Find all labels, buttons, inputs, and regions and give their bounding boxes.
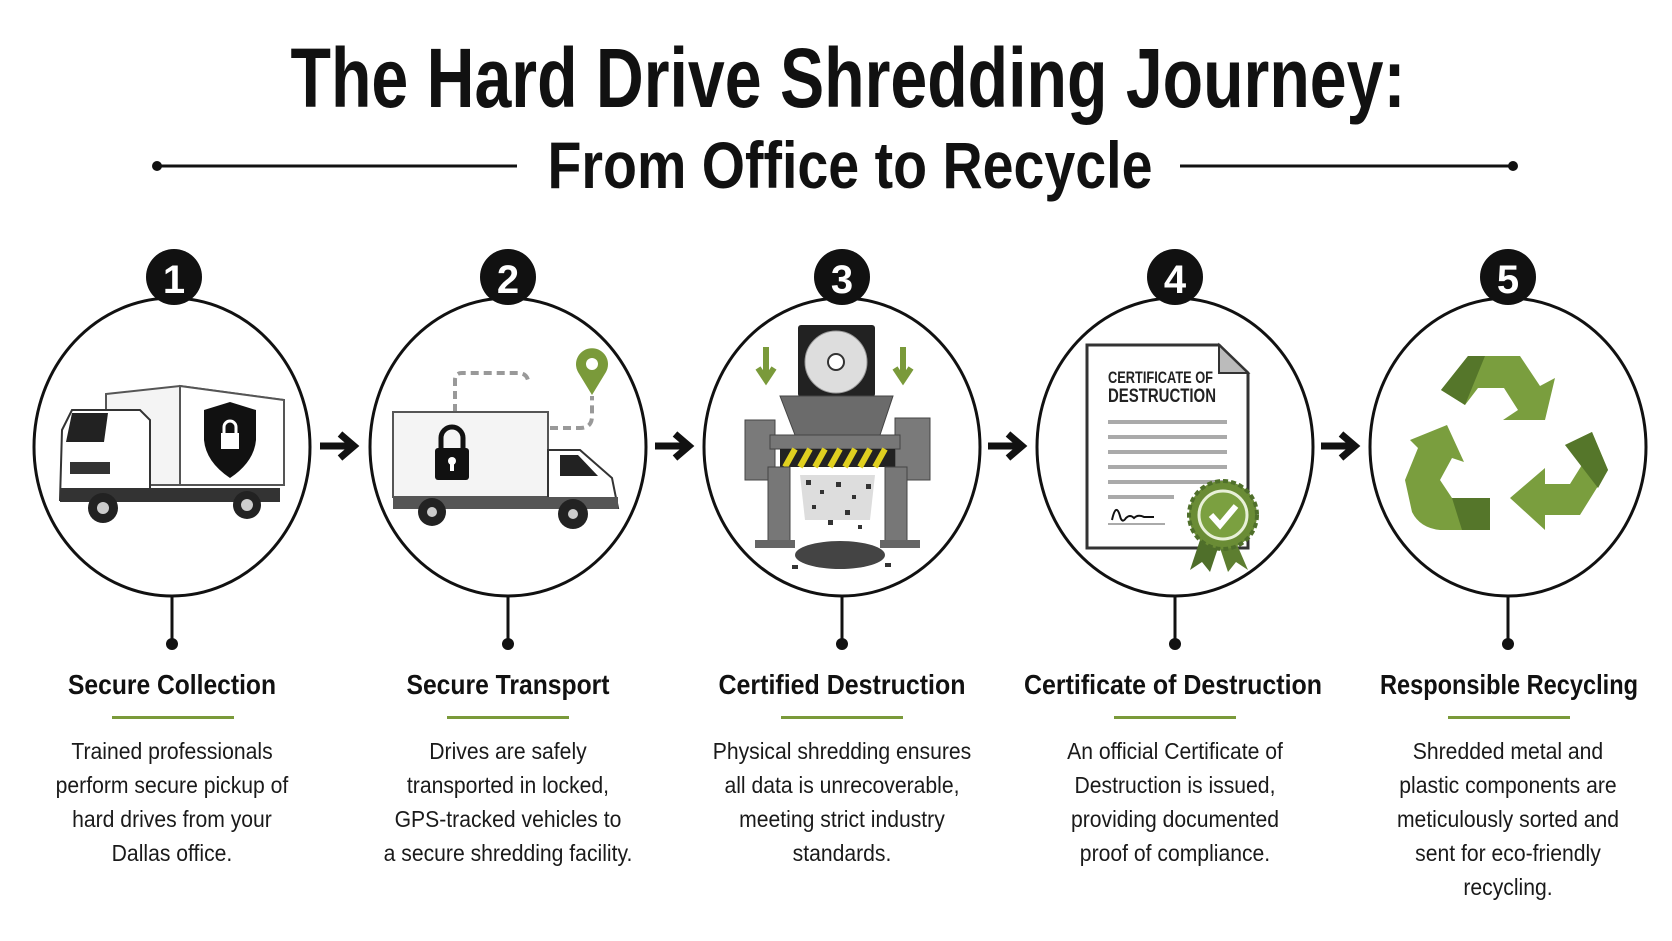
text: step 2: Drives are safely — [429, 738, 587, 764]
icon: truck with shield — [60, 386, 284, 523]
arrow 2 — [655, 434, 689, 458]
text: step 5: plastic components are — [1399, 772, 1617, 798]
subtitle with rules — [152, 128, 1518, 202]
text: step 2: Secure Transport — [406, 669, 610, 700]
step texts — [56, 669, 1638, 900]
step 3: certified destruction — [704, 249, 980, 650]
text: step 5 — [1380, 669, 1638, 900]
text: step 5: meticulously sorted and — [1397, 806, 1619, 832]
text: step 5: sent for eco-friendly — [1415, 840, 1601, 866]
badge 4 — [1147, 249, 1203, 305]
icon: certificate document with seal — [1087, 345, 1257, 572]
arrow 3 — [988, 434, 1022, 458]
step 5: responsible recycling — [1370, 249, 1646, 650]
text: step 3 — [713, 669, 971, 866]
step 1: secure collection — [34, 249, 310, 650]
text: step 5: Shredded metal and — [1413, 738, 1603, 764]
text: step 2: transported in locked, — [407, 772, 609, 798]
text: step 4: providing documented — [1071, 806, 1279, 832]
text: step 4: Destruction is issued, — [1075, 772, 1275, 798]
arrow 1 — [320, 434, 354, 458]
text: step 3: Physical shredding ensures — [713, 738, 971, 764]
badge 1: 1 — [163, 258, 185, 302]
text: step 4 — [1024, 669, 1322, 866]
badge 5: 5 — [1497, 258, 1519, 302]
text: step 1: Dallas office. — [112, 840, 232, 866]
text: step 3: Certified Destruction — [718, 669, 966, 700]
icon: recycle symbol — [1405, 356, 1608, 530]
arrow 4 — [1321, 434, 1355, 458]
icon: certificate document with seal: CERTIFICATE OF — [1108, 368, 1213, 387]
title: The Hard Drive Shredding Journey: — [290, 31, 1406, 125]
text: step 3: standards. — [793, 840, 891, 866]
icon: truck with lock and GPS — [393, 348, 618, 529]
badge 4: 4 — [1164, 258, 1187, 302]
text: step 1: hard drives from your — [72, 806, 272, 832]
badge 3 — [814, 249, 870, 305]
step 2: secure transport — [370, 249, 646, 650]
text: step 4: Certificate of Destruction — [1024, 669, 1322, 700]
text: step 5: recycling. — [1463, 874, 1553, 900]
step 4: certificate of destruction — [1037, 249, 1313, 650]
subtitle with rules: From Office to Recycle — [548, 128, 1152, 202]
badge 1 — [146, 249, 202, 305]
text: step 1 — [56, 669, 289, 866]
icon: shredder with hard drive — [745, 325, 930, 569]
text: step 3: meeting strict industry — [739, 806, 945, 832]
badge 5 — [1480, 249, 1536, 305]
text: step 2: a secure shredding facility. — [384, 840, 632, 866]
text: step 2 — [384, 669, 632, 866]
text: step 3: all data is unrecoverable, — [724, 772, 960, 798]
text: step 4: proof of compliance. — [1080, 840, 1270, 866]
badge 2 — [480, 249, 536, 305]
icon: certificate document with seal: DESTRUCTION — [1108, 386, 1216, 407]
badge 2: 2 — [497, 258, 519, 302]
badge 3: 3 — [831, 258, 853, 302]
text: step 2: GPS-tracked vehicles to — [395, 806, 621, 832]
text: step 1: Trained professionals — [71, 738, 273, 764]
text: step 4: An official Certificate of — [1067, 738, 1284, 764]
text: step 1: perform secure pickup of — [56, 772, 289, 798]
text: step 1: Secure Collection — [68, 669, 276, 700]
